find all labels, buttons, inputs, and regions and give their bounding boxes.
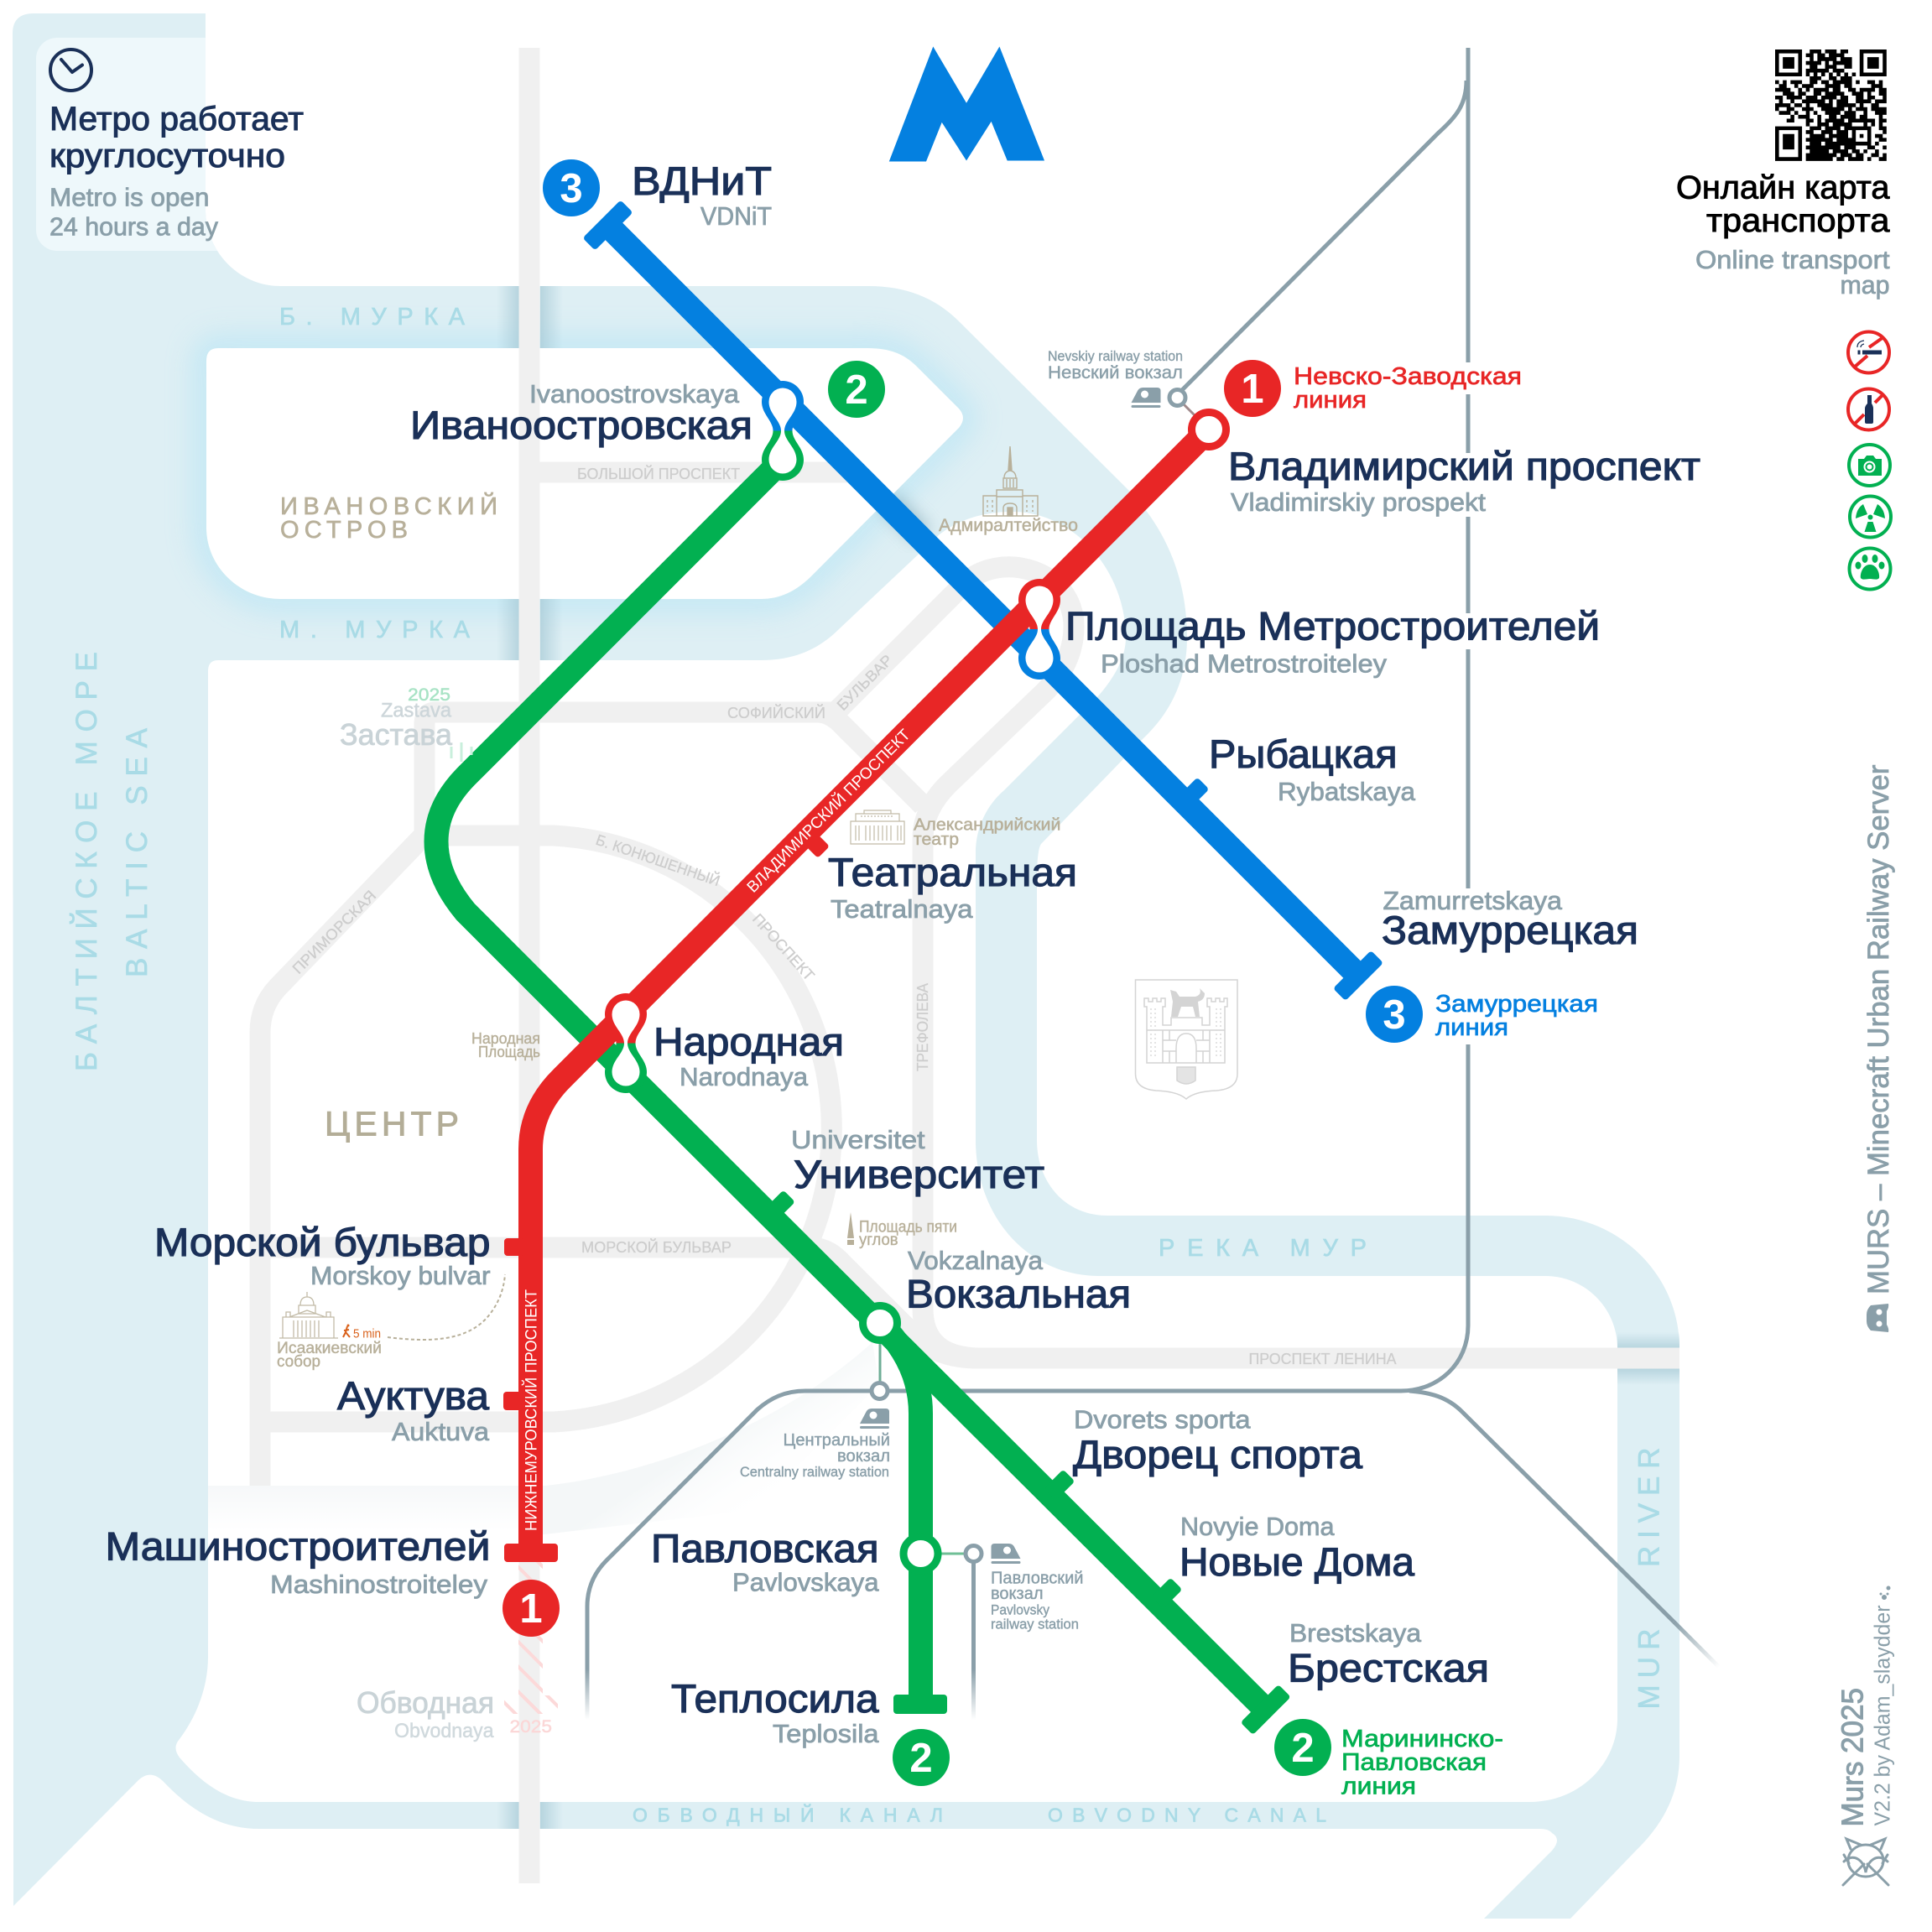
station: Dvorets sporta: Dvorets sporta [1074, 1404, 1251, 1435]
QR code [1775, 51, 1887, 159]
street names: БУЛЬВАР [834, 652, 896, 714]
station: Morskoy bulvar: Morskoy bulvar [310, 1261, 490, 1290]
line name: Zamurretskaya [1435, 991, 1598, 1041]
landmark: Narodnaya square [471, 1030, 540, 1060]
station: Pavlovskaya [651, 1526, 879, 1597]
street names: ПРИМОРСКАЯ [289, 887, 379, 977]
station: Rybatskaya: Rybatskaya [1278, 777, 1416, 806]
landmark: Five corners square: Площадь пяти [859, 1218, 957, 1237]
online map caption [1676, 169, 1890, 299]
railway station label: Pavlovsky [991, 1569, 1084, 1633]
station: Narodnaya [654, 1019, 844, 1091]
line name: Nevsko-Zavodskaya: линия [1294, 387, 1367, 414]
icon: no smoking [1848, 332, 1889, 372]
station: Vokzalnaya [906, 1246, 1131, 1315]
line street labels on red: ВЛАДИМИРСКИЙ ПРОСПЕКТ [743, 726, 914, 897]
station: Brestskaya: Брестская [1288, 1646, 1489, 1690]
railway station label: Pavlovsky: вокзал [991, 1585, 1044, 1603]
railway station label: Central: вокзал [837, 1447, 890, 1466]
railway lines [587, 48, 1719, 1720]
station: Teplosila: Teplosila [773, 1719, 879, 1748]
station: Zamurretskaya: Замуррецкая [1382, 908, 1638, 952]
station: Dvorets sporta [1073, 1404, 1363, 1476]
icon: photography allowed [1849, 445, 1890, 486]
street names: СОФИЙСКИЙ [727, 704, 825, 721]
landmark: Alexandrinsky theatre: Александрийский [914, 815, 1060, 834]
version credit: V2.2 by Adam_slaydder [1869, 1605, 1894, 1825]
station: Mashinostroiteley: Mashinostroiteley [270, 1570, 488, 1599]
water labels: ОБВОДНЫЙ КАНАЛ [633, 1804, 943, 1825]
station: Mashinostroiteley [106, 1523, 490, 1599]
icon: train Nevskiy [1131, 388, 1161, 408]
water glow around Ivanovsky island [36, 38, 963, 599]
landmark: St Isaac's cathedral and walking route: 5 min [353, 1327, 381, 1341]
water labels: MUR [1633, 1629, 1666, 1710]
line badge 1 top: 1 [1241, 367, 1264, 412]
railway station label: Pavlovsky: Павловский [991, 1569, 1084, 1587]
station: Ivanoostrovskaya [410, 379, 752, 447]
station: Ploshad Metrostroiteley: Ploshad Metrostroiteley [1101, 649, 1388, 678]
street names: ПРОСПЕКТ [749, 910, 818, 984]
icon: radiation [1850, 497, 1891, 537]
coat of arms [1136, 980, 1237, 1099]
landmark: Five corners square: углов [859, 1232, 898, 1249]
planned station: Obvodnaya: Obvodnaya [394, 1720, 494, 1742]
line street labels on red: НИЖНЕМУРОВСКИЙ ПРОСПЕКТ [522, 1289, 540, 1531]
water labels: РЕКА МУР [1159, 1235, 1367, 1262]
station: Teplosila: Теплосила [671, 1676, 879, 1721]
planned station: Obvodnaya: 2025 [510, 1717, 552, 1737]
street names: ТРЕФОЛЕВА [914, 983, 931, 1071]
water labels: М. МУРКА [279, 617, 471, 643]
line name: Marininsko-Pavlovskaya: Марининско- [1341, 1726, 1503, 1752]
district labels: ИВАНОВСКИЙ [280, 492, 497, 520]
station: Auktuva: Ауктува [337, 1373, 490, 1418]
railway connectors [880, 404, 1196, 1554]
landmark: Admiralty [939, 446, 1078, 535]
planned station: Obvodnaya: Обводная [357, 1685, 494, 1720]
online map caption: транспорта [1706, 203, 1890, 239]
station: Morskoy bulvar [154, 1220, 490, 1290]
line street labels on red [522, 726, 914, 1531]
planned station: Zastava: Застава [340, 717, 453, 752]
line 2 green [436, 460, 1291, 1735]
landmark: Narodnaya square: Площадь [478, 1044, 540, 1060]
line badge 1 bottom: 1 [519, 1586, 543, 1632]
railway station label: Nevskiy [1048, 348, 1183, 383]
street names [289, 465, 1396, 1367]
hours note: Метро работает [49, 101, 304, 138]
icon: train Pavlovsky [992, 1544, 1020, 1564]
water labels: OBVODNY CANAL [1048, 1804, 1326, 1825]
railway station label: Central: Centralny railway station [740, 1464, 889, 1480]
station: Novyie Doma: Новые Дома [1180, 1539, 1415, 1584]
railway station label: Nevskiy: Невский вокзал [1048, 363, 1183, 383]
street names: МОРСКОЙ БУЛЬВАР [581, 1238, 732, 1256]
planned station: Zastava: 2025 [408, 685, 450, 705]
icon: clock [50, 49, 91, 91]
district labels: ОСТРОВ [280, 517, 408, 544]
icon: no alcohol [1848, 389, 1889, 430]
metro logo [889, 47, 1044, 161]
station: Brestskaya [1288, 1618, 1489, 1690]
planned station: Zastava [340, 685, 471, 762]
station: Dvorets sporta: Дворец спорта [1073, 1432, 1363, 1476]
station: Universitet: Университет [794, 1152, 1044, 1196]
water labels: Б. МУРКА [279, 304, 466, 331]
station: Teplosila [671, 1676, 879, 1748]
map title credit: Murs 2025 [1836, 1688, 1869, 1827]
street names: ПРОСПЕКТ ЛЕНИНА [1248, 1351, 1396, 1367]
station: VDNiT [632, 159, 772, 231]
station: Mashinostroiteley: Машиностроителей [106, 1523, 490, 1569]
line badge 2 top: 2 [845, 367, 868, 413]
station: VDNiT: ВДНиТ [632, 159, 772, 203]
interchange: Ploshad Metrostroiteley [1018, 579, 1060, 680]
planned station: Obvodnaya [357, 1685, 552, 1742]
line name: Nevsko-Zavodskaya [1294, 363, 1522, 414]
station: Pavlovskaya: Pavlovskaya [732, 1567, 879, 1597]
line name: Marininsko-Pavlovskaya: линия [1341, 1773, 1416, 1800]
online map caption: Онлайн карта [1676, 169, 1890, 206]
line name: Nevsko-Zavodskaya: Невско-Заводская [1294, 363, 1522, 390]
railway station label: Central: Центральный [784, 1431, 890, 1450]
hours note [49, 101, 304, 242]
icon: discord [1867, 1304, 1888, 1332]
station: Ivanoostrovskaya: Иваноостровская [410, 403, 752, 447]
line 3 blue [582, 200, 1383, 1001]
interchange: Ivanoostrovskaya [762, 381, 804, 481]
line name: Zamurretskaya: линия [1435, 1014, 1508, 1041]
hours note: круглосуточно [49, 138, 285, 174]
station: Morskoy bulvar: Морской бульвар [154, 1220, 490, 1264]
line badge 1 top [1224, 360, 1281, 417]
station: Ploshad Metrostroiteley: Площадь Метростроителей [1065, 604, 1600, 648]
station: Teatralnaya [828, 850, 1077, 924]
planned station: Zastava: Zastava [381, 700, 452, 721]
street names: Б. КОНЮШЕННЫЙ [594, 831, 722, 889]
line badge 2 Brestskaya: 2 [1291, 1726, 1315, 1771]
water labels: БАЛТИЙСКОЕ МОРЕ [70, 652, 103, 1071]
road network [260, 48, 1679, 1883]
hours note: Metro is open [49, 183, 210, 211]
road shadows on water [497, 286, 1679, 1829]
district labels [280, 492, 497, 1143]
station: Ivanoostrovskaya: Ivanoostrovskaya [529, 379, 740, 409]
landmark: Alexandrinsky theatre: театр [914, 831, 959, 849]
station: Novyie Doma [1180, 1512, 1415, 1584]
station: Vokzalnaya: Vokzalnaya [908, 1246, 1044, 1275]
landmark: St Isaac's cathedral and walking route [277, 1274, 505, 1371]
planned extension hatch [504, 1562, 558, 1714]
station: Narodnaya: Народная [654, 1019, 844, 1064]
water labels: BALTIC SEA [121, 727, 154, 977]
station: Rybatskaya [1209, 732, 1416, 806]
station: Vokzalnaya: Вокзальная [906, 1272, 1131, 1315]
station: VDNiT: VDNiT [700, 201, 772, 231]
station: Pavlovskaya: Павловская [651, 1526, 879, 1570]
station: Ploshad Metrostroiteley [1065, 604, 1600, 678]
landmark: Five corners square [847, 1212, 957, 1249]
station nodes and rail stops [862, 389, 1226, 1570]
line badge 2 Brestskaya [1274, 1719, 1331, 1776]
interchange: Narodnaya [605, 993, 647, 1093]
icon: raccoon logo [1843, 1839, 1888, 1885]
district labels: ЦЕНТР [325, 1104, 459, 1143]
water labels: RIVER [1633, 1448, 1666, 1567]
station: Vladimirskiy prospekt: Владимирский проспект [1228, 444, 1700, 488]
line badge 3 top: 3 [560, 166, 583, 211]
line name: Zamurretskaya: Замуррецкая [1435, 991, 1598, 1018]
line badge 2 bottom [893, 1729, 950, 1786]
station: Rybatskaya: Рыбацкая [1209, 732, 1398, 776]
station: Zamurretskaya: Zamurretskaya [1383, 886, 1563, 915]
street names: БОЛЬШОЙ ПРОСПЕКТ [577, 465, 740, 482]
online map caption: Online transport [1695, 245, 1890, 274]
line badge 3 bottom: 3 [1383, 992, 1406, 1038]
icon: train Central [860, 1409, 889, 1429]
line 1 red [503, 430, 1209, 1562]
station: Zamurretskaya [1382, 886, 1638, 952]
station: Teatralnaya: Teatralnaya [831, 894, 973, 924]
icon: paw [1849, 549, 1891, 589]
station: Teatralnaya: Театральная [828, 850, 1077, 894]
station: Auktuva [337, 1373, 490, 1446]
icon: small paw credit [1879, 1586, 1891, 1600]
station: Universitet: Universitet [791, 1125, 925, 1154]
server credit: MURS – Minecraft Urban Railway Server [1862, 764, 1895, 1294]
line badge 2 top [828, 361, 885, 418]
station: Vladimirskiy prospekt [1228, 444, 1700, 517]
southern fade of the city streets [208, 1342, 910, 1535]
station: Brestskaya: Brestskaya [1289, 1618, 1422, 1648]
landmark: St Isaac's cathedral and walking route: собор [277, 1353, 320, 1371]
railway station label: Pavlovsky: railway station [991, 1616, 1079, 1633]
online map caption: map [1841, 270, 1889, 299]
line badge 2 bottom: 2 [909, 1736, 933, 1781]
station: Auktuva: Auktuva [392, 1417, 490, 1446]
landmark: Admiralty: Адмиралтейство [939, 516, 1078, 535]
station: Novyie Doma: Novyie Doma [1180, 1512, 1335, 1541]
landmark: Alexandrinsky theatre [851, 810, 1060, 849]
station: Narodnaya: Narodnaya [680, 1062, 809, 1091]
line badge 3 bottom [1366, 986, 1423, 1043]
water labels [70, 304, 1666, 1825]
landmark: St Isaac's cathedral and walking route: Исаакиевский [277, 1340, 382, 1357]
landmark: Narodnaya square: Народная [471, 1030, 540, 1047]
railway station label: Nevskiy: Nevskiy railway station [1048, 348, 1183, 364]
line name: Marininsko-Pavlovskaya: Павловская [1341, 1749, 1487, 1776]
line name: Marininsko-Pavlovskaya [1341, 1726, 1503, 1800]
station: Vladimirskiy prospekt: Vladimirskiy prospekt [1231, 487, 1486, 517]
hours note: 24 hours a day [49, 211, 218, 242]
railway station label: Central [740, 1431, 890, 1480]
railway station label: Pavlovsky: Pavlovsky [991, 1602, 1049, 1617]
line badge 3 top [543, 159, 600, 216]
station: Universitet [791, 1125, 1044, 1196]
line badge 1 bottom [503, 1580, 560, 1637]
